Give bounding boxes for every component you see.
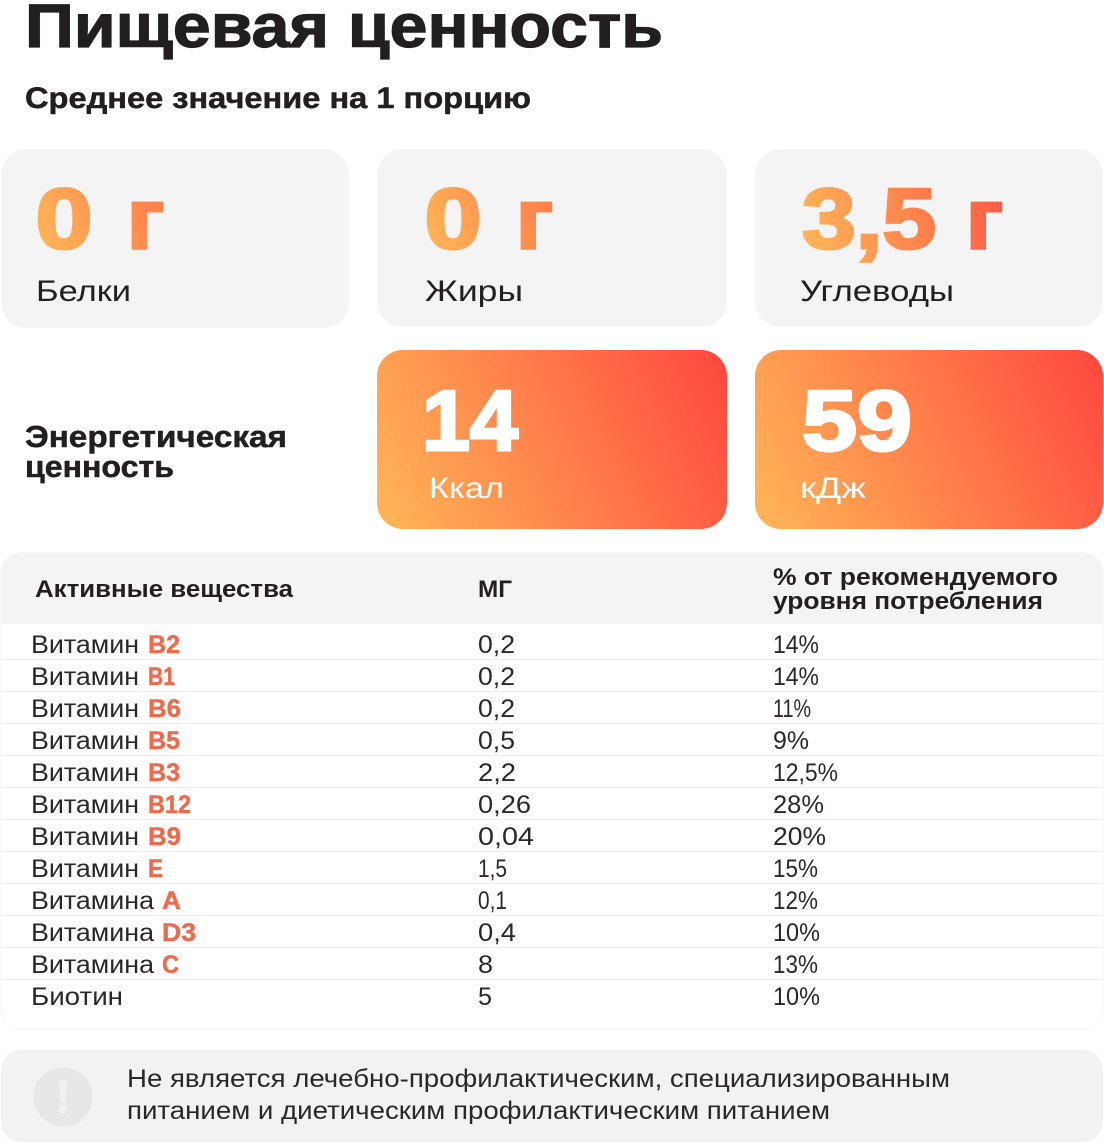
- row: B2: [31, 631, 819, 659]
- row: A: Витамина: [31, 887, 154, 915]
- panel: kJ: 59: [802, 374, 912, 469]
- row: C: Витамина: [31, 951, 154, 979]
- table header: Активные вещества: [35, 576, 294, 603]
- row: B3: [31, 759, 838, 787]
- row: D3: [31, 919, 820, 947]
- panel: kJ: кДж: [800, 472, 866, 505]
- row: B5: 9%: [773, 727, 809, 755]
- panel: protein: г: [127, 172, 164, 267]
- row: biotin: 10%: [773, 983, 820, 1011]
- panel: carbohydrates: [755, 149, 1103, 327]
- row: B12: 0,26: [478, 791, 531, 819]
- panel: kcal: Ккал: [429, 472, 504, 505]
- panel: fats: [377, 149, 727, 327]
- row: E: Витамин: [31, 855, 139, 883]
- row: biotin: Биотин: [31, 983, 123, 1011]
- row: biotin: 5: [478, 983, 492, 1011]
- panel: fats: Жиры: [425, 275, 523, 308]
- table header: [35, 564, 1058, 615]
- row: B2: 14%: [773, 631, 819, 659]
- row: E: [31, 855, 818, 883]
- panel: kcal: 14: [422, 374, 518, 469]
- panel: active substances table: [1, 553, 1103, 1029]
- row: B1: B1: [148, 663, 175, 691]
- row: C: [31, 951, 818, 979]
- row: B6: Витамин: [31, 695, 139, 723]
- row: B12: 28%: [773, 791, 824, 819]
- panel: disclaimer: [1, 1050, 1103, 1142]
- panel: kcal: [377, 350, 727, 529]
- row: B1: 14%: [773, 663, 819, 691]
- row: D3: Витамина: [31, 919, 154, 947]
- row: A: A: [162, 887, 181, 915]
- row: C: C: [162, 951, 179, 979]
- row: B3: Витамин: [31, 759, 139, 787]
- icon: exclamation mark: [34, 1068, 92, 1126]
- row: B6: 11%: [773, 695, 811, 723]
- row: B1: [31, 663, 819, 691]
- row: B9: B9: [148, 823, 181, 851]
- row: B3: B3: [148, 759, 180, 787]
- row: E: E: [148, 855, 163, 883]
- row: B2: Витамин: [31, 631, 139, 659]
- row: D3: 0,4: [478, 919, 516, 947]
- energy value heading: ценность: [25, 449, 174, 484]
- row: A: 12%: [773, 887, 818, 915]
- panel: protein: [1, 149, 349, 328]
- table header: % от рекомендуемого: [773, 564, 1058, 591]
- row: B9: [31, 823, 826, 851]
- disclaimer text: Не является лечебно-профилактическим, специализированным: [127, 1065, 950, 1093]
- row: C: 13%: [773, 951, 818, 979]
- row: E: 1,5: [478, 855, 507, 883]
- disclaimer text: питанием и диетическим профилактическим питанием: [127, 1097, 830, 1125]
- row: B9: 0,04: [478, 823, 534, 851]
- panel: fats: 0: [424, 172, 482, 267]
- row: B2: B2: [148, 631, 180, 659]
- row: B12: B12: [148, 791, 191, 819]
- row: B2: 0,2: [478, 631, 515, 659]
- row: B3: 12,5%: [773, 759, 838, 787]
- row: B9: Витамин: [31, 823, 139, 851]
- panel: protein: Белки: [36, 275, 131, 308]
- row: B5: B5: [148, 727, 180, 755]
- panel: carbohydrates: 3,5: [802, 172, 936, 267]
- row: B6: 0,2: [478, 695, 515, 723]
- row: B6: [31, 695, 811, 723]
- row: A: 0,1: [478, 887, 507, 915]
- panel: fats: г: [516, 172, 553, 267]
- row: B3: 2,2: [478, 759, 516, 787]
- panel: protein: 0: [36, 172, 92, 267]
- panel: carbohydrates: г: [966, 172, 1003, 267]
- row: D3: 10%: [773, 919, 820, 947]
- energy value heading: Энергетическая: [25, 419, 287, 454]
- row: B5: 0,5: [478, 727, 515, 755]
- row: B6: B6: [148, 695, 181, 723]
- row: C: 8: [478, 951, 493, 979]
- row: B1: Витамин: [31, 663, 139, 691]
- table header: уровня потребления: [773, 588, 1043, 615]
- panel: carbohydrates: Углеводы: [800, 275, 954, 308]
- disclaimer text: [127, 1065, 950, 1125]
- table header: МГ: [478, 576, 512, 603]
- row: B9: 20%: [773, 823, 826, 851]
- row: B12: [31, 791, 824, 819]
- row: B5: [31, 727, 809, 755]
- row: B1: 0,2: [478, 663, 515, 691]
- row: E: 15%: [773, 855, 818, 883]
- row: B12: Витамин: [31, 791, 139, 819]
- row: D3: D3: [162, 919, 196, 947]
- row: biotin: [31, 983, 820, 1011]
- panel: kJ: [755, 350, 1103, 529]
- subtitle: Среднее значение на 1 порцию: [25, 82, 531, 115]
- row: B5: Витамин: [31, 727, 139, 755]
- energy value heading: [25, 419, 287, 484]
- row: A: [31, 887, 818, 915]
